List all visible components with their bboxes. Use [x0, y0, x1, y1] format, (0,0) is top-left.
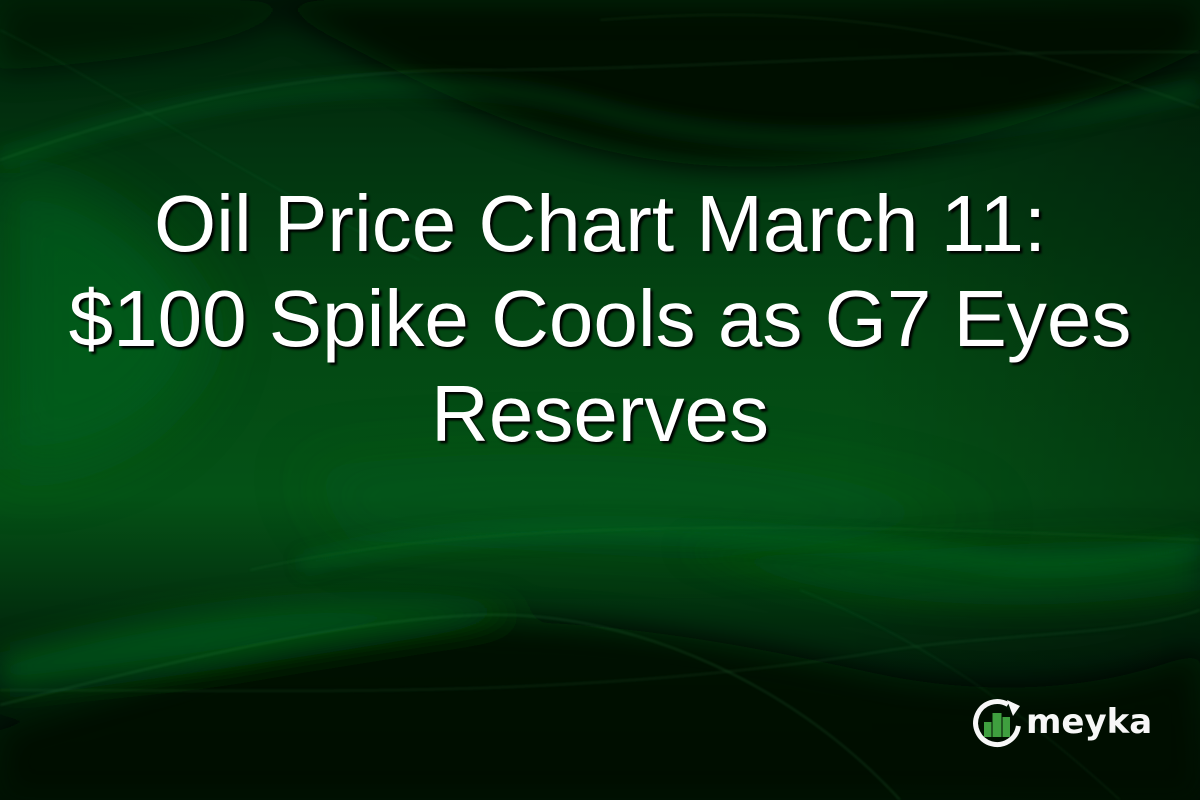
title: Oil Price Chart March 11: — [154, 179, 1046, 268]
logo: meyka — [973, 699, 1152, 748]
title — [69, 179, 1132, 458]
title: Reserves — [431, 369, 769, 458]
logo wordmark: meyka — [1026, 702, 1152, 742]
title: $100 Spike Cools as G7 Eyes — [69, 274, 1131, 363]
icon: circular arrow with green bars — [973, 699, 1021, 748]
